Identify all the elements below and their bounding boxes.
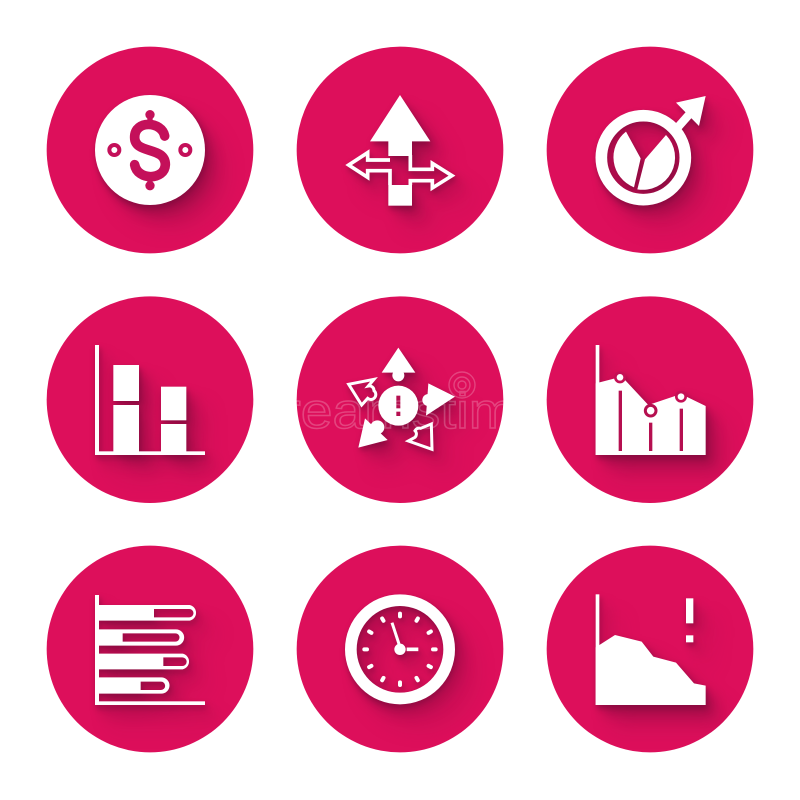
- icon: declining area chart with exclamation: [596, 594, 706, 705]
- panel: wall clock badge: [297, 546, 503, 752]
- icon: clock: [345, 594, 455, 704]
- panel: branching arrows badge: [297, 47, 503, 253]
- icon: area chart with markers: [596, 345, 706, 455]
- panel: stacked bar chart badge: [47, 296, 253, 503]
- icon: stacked bar chart: [95, 345, 205, 455]
- icon: dollar coin: [95, 95, 205, 205]
- icon: horizontal bar chart: [95, 595, 205, 705]
- panel: line area chart badge: [547, 296, 753, 503]
- watermark: dreamstime: [250, 383, 548, 439]
- panel: horizontal bar chart badge: [47, 546, 253, 752]
- panel: declining area chart alert badge: [547, 546, 753, 752]
- panel: pie chart male symbol badge: [547, 47, 753, 253]
- panel: five arrows alert badge: [297, 296, 503, 503]
- panel: dollar coin badge: [47, 47, 253, 253]
- icon: ring with arrow and pie chart: [601, 96, 706, 200]
- icon: arrows around exclamation: [349, 348, 455, 449]
- icon: three direction arrows: [349, 95, 452, 206]
